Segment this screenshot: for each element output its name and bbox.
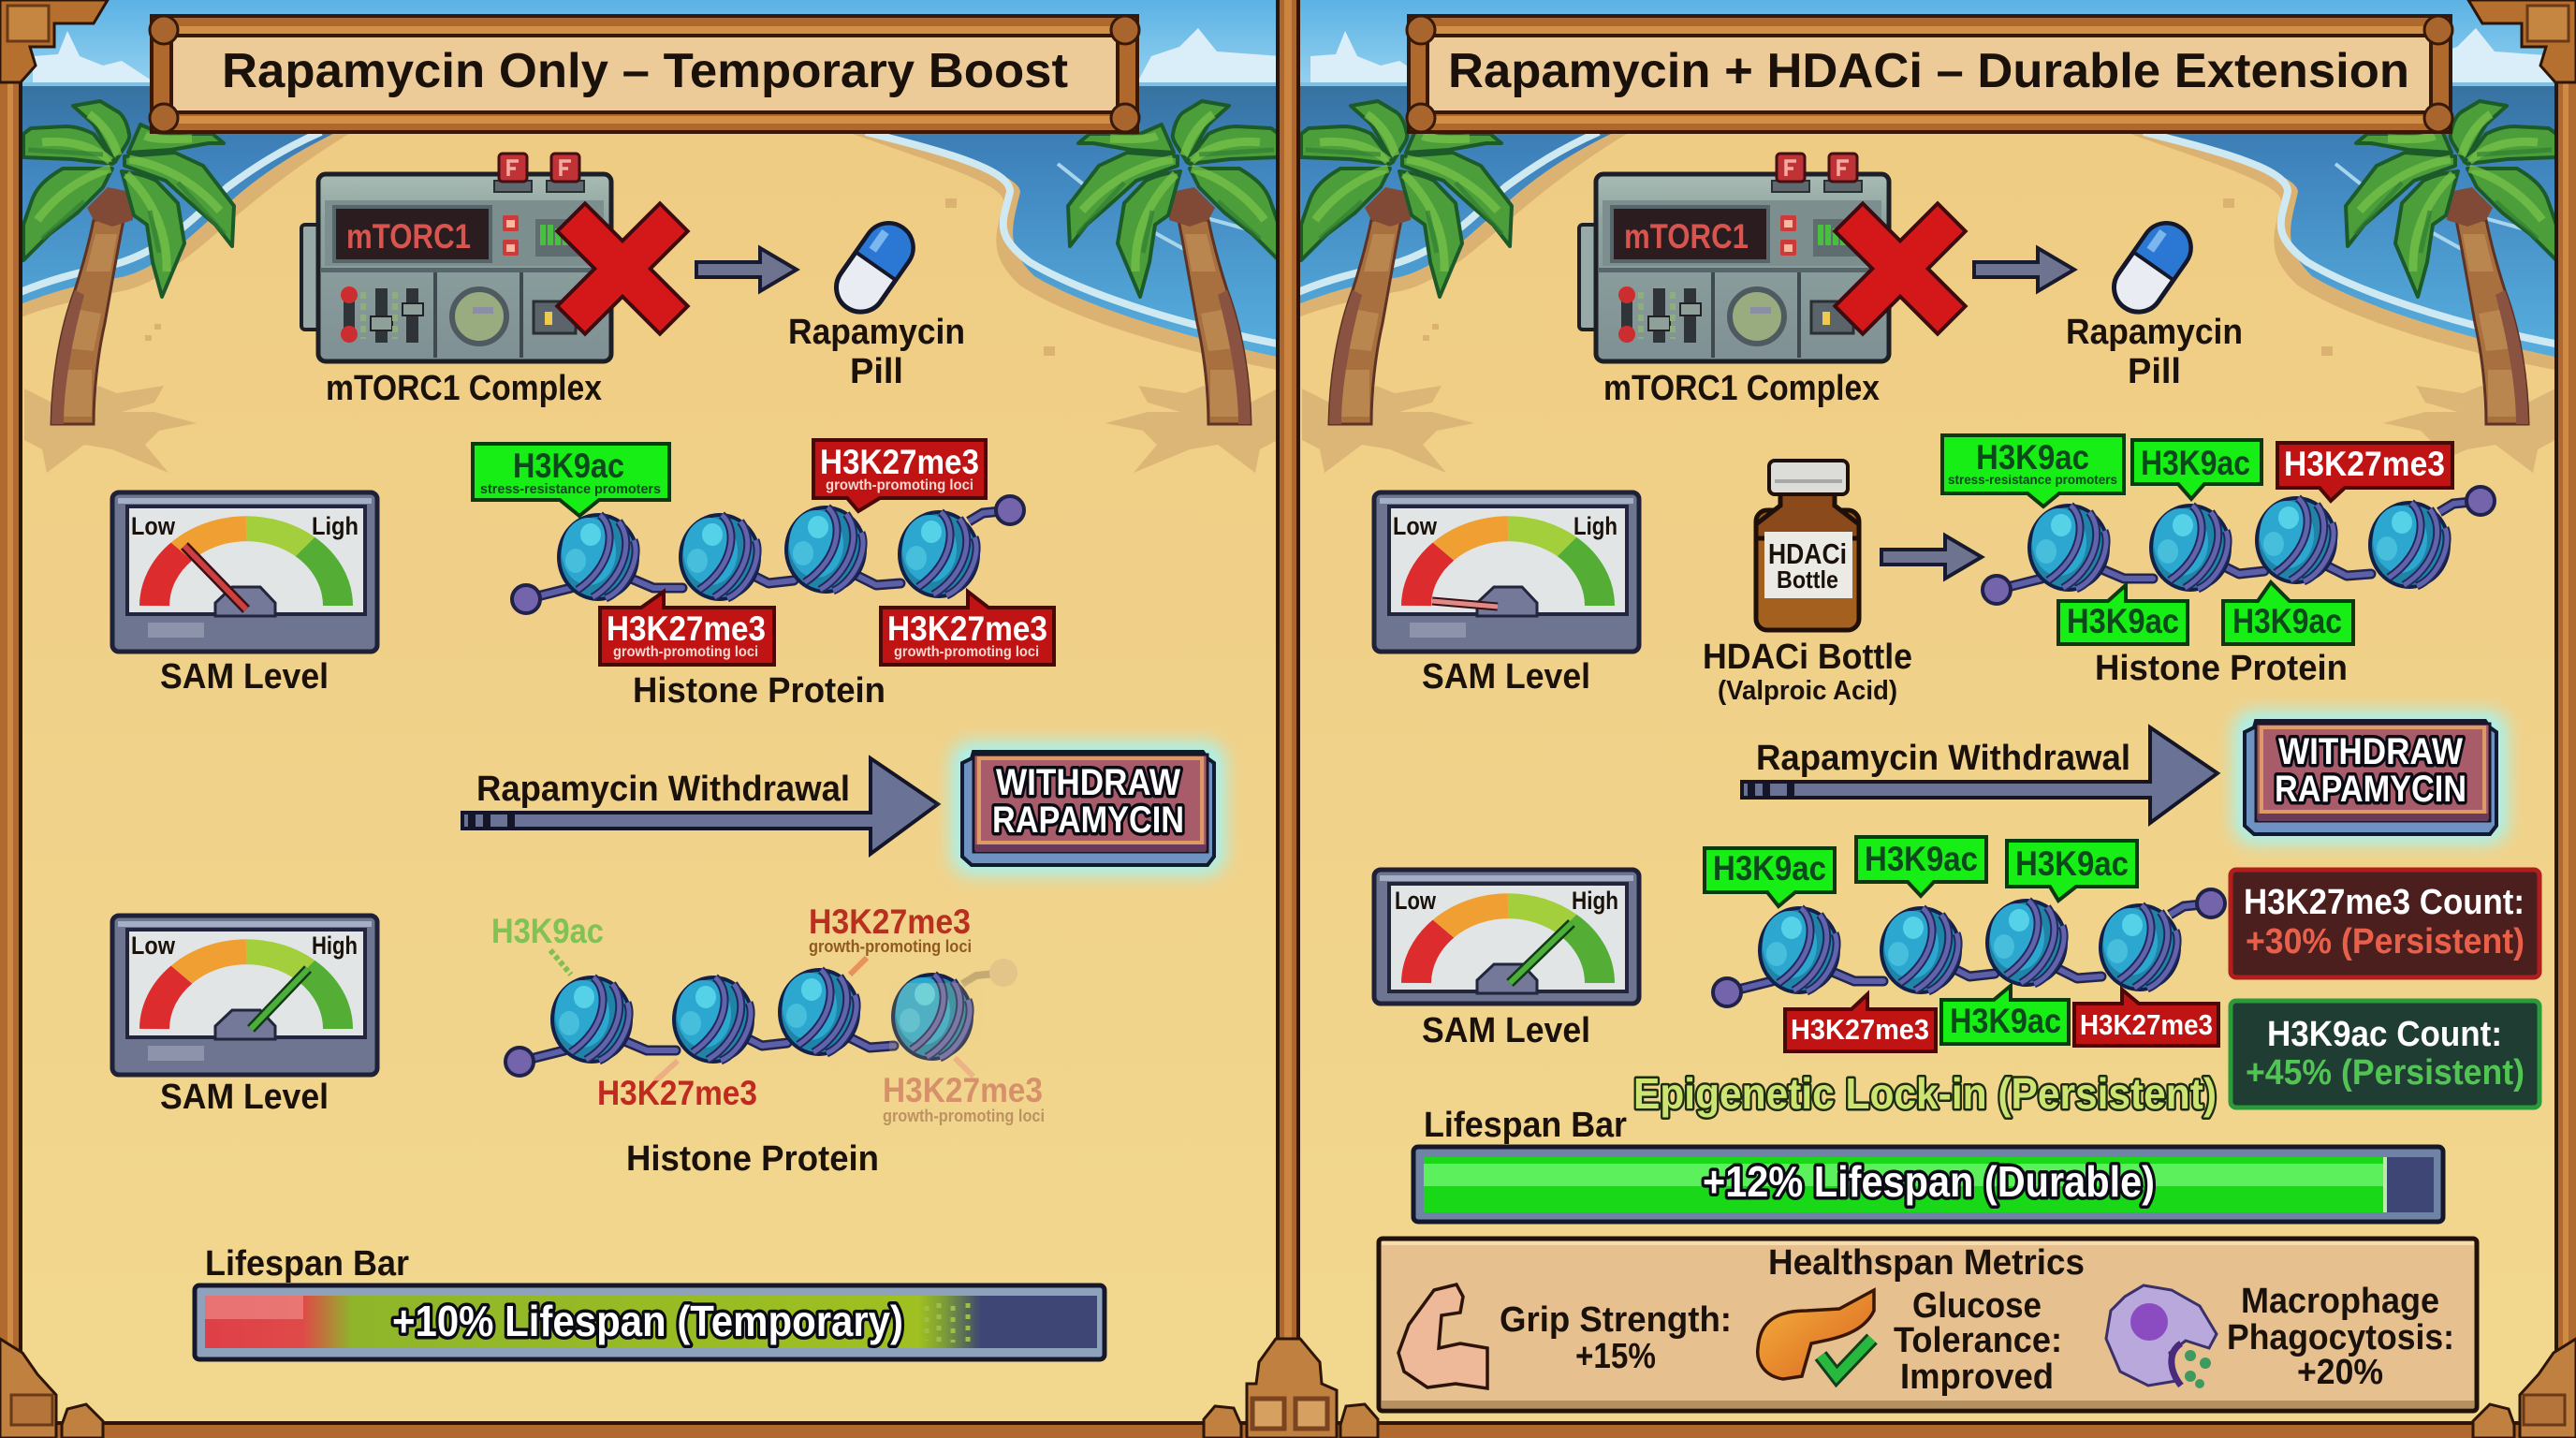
tag: H3K9ac: H3K9ac bbox=[513, 447, 624, 485]
tag: H3K27me3 bottom 1: H3K27me3 bbox=[1791, 1013, 1929, 1046]
corner: top right bbox=[2468, 0, 2576, 82]
label: lifespan bar: Lifespan Bar bbox=[1424, 1106, 1627, 1145]
corner: bottom right bbox=[2473, 1339, 2576, 1438]
tag: H3K9ac with sub: H3K9ac bbox=[1976, 438, 2089, 477]
tag: H3K27me3 lower: H3K27me3 bbox=[597, 1074, 757, 1112]
text: glucose tolerance: Tolerance: bbox=[1894, 1321, 2062, 1360]
label: rapamycin pill: Pill bbox=[850, 352, 903, 391]
corner: bottom left bbox=[0, 1339, 103, 1438]
count box: H3K9ac bbox=[2231, 1001, 2539, 1108]
post base: centre bbox=[1204, 1339, 1378, 1438]
count box: H3K9ac: H3K9ac Count: bbox=[2267, 1015, 2502, 1054]
label: rapamycin pill: Pill bbox=[2128, 352, 2181, 391]
tag: H3K27me3 bottom 2 bbox=[2074, 990, 2218, 1046]
label: mTORC1 complex: mTORC1 Complex bbox=[1603, 369, 1880, 408]
label: HDACi bottle: HDACi Bottle bbox=[1703, 638, 1912, 677]
tag: H3K9ac: stress-resistance promoters bbox=[480, 481, 661, 497]
tag: H3K9ac 2: H3K9ac bbox=[1865, 840, 1978, 878]
label: histone protein: Histone Protein bbox=[633, 671, 886, 711]
text: macrophage phagocytosis: Macrophage bbox=[2241, 1282, 2439, 1321]
heading: Healthspan Metrics bbox=[1768, 1243, 2085, 1283]
label: lifespan bar: Lifespan Bar bbox=[205, 1244, 409, 1284]
tag: H3K9ac 1 bbox=[1705, 848, 1835, 906]
tag: H3K27me3 top: H3K27me3 bbox=[820, 443, 979, 481]
button: withdraw rapamycin: RAPAMYCIN bbox=[2275, 769, 2466, 810]
text: glucose tolerance bbox=[1894, 1286, 2062, 1397]
red X bbox=[1863, 231, 1938, 306]
icon: flexed arm bbox=[1398, 1284, 1487, 1388]
title banner left: Rapamycin Only – Temporary Boost bbox=[222, 44, 1068, 98]
tag: H3K27me3 bottom 1 bbox=[1785, 994, 1936, 1051]
text: glucose tolerance: Improved bbox=[1900, 1357, 2054, 1397]
tag: H3K27me3 upper bbox=[809, 902, 972, 956]
tag: H3K27me3 bottom 2: H3K27me3 bbox=[2080, 1008, 2213, 1041]
panel: rapamycin only bbox=[21, 0, 1281, 1423]
faded tag: H3K27me3: H3K27me3 bbox=[883, 1071, 1043, 1109]
withdrawal arrow bbox=[462, 758, 938, 854]
SAM gauge high right bbox=[1374, 870, 1639, 1004]
SAM gauge low: Ligh bbox=[312, 512, 359, 540]
histone chain after withdrawal bbox=[491, 902, 1045, 1125]
text: macrophage phagocytosis bbox=[2227, 1282, 2454, 1392]
label: SAM level 2: SAM Level bbox=[160, 1078, 329, 1117]
corner: top left bbox=[0, 0, 108, 82]
tag: H3K27me3 top: growth-promoting loci bbox=[826, 477, 973, 493]
label: rapamycin pill bbox=[2066, 313, 2243, 391]
beach scene left bbox=[22, 0, 1276, 473]
faded tag: H3K9ac: H3K9ac bbox=[491, 912, 604, 950]
text: macrophage phagocytosis: +20% bbox=[2297, 1353, 2383, 1392]
withdrawal arrow bbox=[1742, 727, 2217, 823]
label: HDACi bottle bbox=[1703, 638, 1912, 706]
SAM gauge high right: High bbox=[1572, 887, 1618, 915]
SAM gauge low right: Ligh bbox=[1573, 512, 1617, 540]
faded tag: H3K27me3 bbox=[883, 1071, 1045, 1125]
tag: H3K9ac with sub bbox=[1942, 435, 2124, 506]
button: withdraw rapamycin bbox=[951, 741, 1225, 875]
label: SAM level: SAM Level bbox=[160, 657, 329, 697]
SAM gauge high right: Low bbox=[1395, 887, 1437, 915]
tag: H3K27me3 bottom 1 bbox=[600, 592, 774, 665]
label: rapamycin withdrawal: Rapamycin Withdrawal bbox=[1756, 739, 2130, 778]
mTORC1 machine left: mTORC1 bbox=[346, 217, 471, 256]
button: withdraw rapamycin: RAPAMYCIN bbox=[992, 800, 1184, 841]
panel: healthspan metrics bbox=[1379, 1239, 2477, 1411]
label: rapamycin pill bbox=[788, 313, 965, 391]
count box: H3K27me3: H3K27me3 Count: bbox=[2244, 883, 2525, 922]
text: grip strength: Grip Strength: bbox=[1500, 1300, 1732, 1340]
label: histone protein: Histone Protein bbox=[2095, 649, 2348, 688]
tag: H3K9ac 2 bbox=[1856, 837, 1986, 896]
arrow to pill bbox=[696, 248, 797, 291]
tag: H3K9ac bottom 2: H3K9ac bbox=[2232, 602, 2342, 640]
SAM gauge high bbox=[112, 916, 377, 1075]
red X bbox=[585, 231, 660, 306]
label: rapamycin pill: Rapamycin bbox=[788, 313, 965, 352]
label: rapamycin withdrawal: Rapamycin Withdrawal bbox=[476, 770, 850, 809]
panel: rapamycin + HDACi bbox=[1298, 0, 2559, 1423]
button: withdraw rapamycin: WITHDRAW bbox=[996, 762, 1180, 803]
SAM gauge low: Low bbox=[131, 512, 176, 540]
mTORC1 machine right bbox=[1579, 154, 1938, 361]
lifespan bar durable bbox=[1413, 1147, 2443, 1222]
tag: H3K27me3 bottom 2 bbox=[881, 592, 1054, 665]
histone chain before withdrawal bbox=[473, 440, 1054, 665]
tag: H3K27me3 bottom 2: growth-promoting loci bbox=[894, 644, 1039, 660]
lifespan bar temporary bbox=[195, 1285, 1105, 1359]
count box: H3K27me3: +30% (Persistent) bbox=[2246, 922, 2525, 961]
SAM gauge low right: Low bbox=[1393, 512, 1438, 540]
icon: pancreas with check bbox=[1758, 1290, 1874, 1379]
tag: H3K27me3 bottom 1: growth-promoting loci bbox=[613, 644, 758, 660]
icon: rapamycin pill bbox=[827, 213, 923, 321]
icon: HDACi bottle: Bottle bbox=[1777, 565, 1838, 594]
lifespan bar temporary: +10% Lifespan (Temporary) bbox=[392, 1297, 903, 1345]
SAM gauge high: Low bbox=[131, 932, 176, 960]
text: grip strength bbox=[1500, 1300, 1732, 1376]
tag: H3K9ac with sub: stress-resistance promoters bbox=[1948, 472, 2117, 487]
title banner right: Rapamycin + HDACi – Durable Extension bbox=[1448, 44, 2409, 98]
label: SAM level 2: SAM Level bbox=[1422, 1011, 1590, 1050]
faded tag: H3K27me3: growth-promoting loci bbox=[883, 1107, 1045, 1125]
text: glucose tolerance: Glucose bbox=[1912, 1286, 2042, 1326]
SAM gauge low right bbox=[1374, 492, 1639, 652]
tag: H3K9ac bbox=[2132, 440, 2261, 499]
tag: H3K27me3 bottom 1: H3K27me3 bbox=[607, 609, 766, 648]
arrow to histones bbox=[1881, 536, 1982, 579]
arrow to pill bbox=[1974, 248, 2074, 291]
text: grip strength: +15% bbox=[1575, 1337, 1656, 1376]
label: rapamycin pill: Rapamycin bbox=[2066, 313, 2243, 352]
count box: H3K27me3 bbox=[2231, 870, 2539, 977]
lifespan bar durable: +12% Lifespan (Durable) bbox=[1703, 1157, 2155, 1206]
tag: H3K27me3 top bbox=[813, 440, 986, 511]
button: withdraw rapamycin bbox=[2233, 711, 2508, 844]
tag: H3K27me3 upper: growth-promoting loci bbox=[809, 937, 972, 956]
tag: H3K9ac bottom: H3K9ac bbox=[1950, 1002, 2061, 1040]
icon: macrophage bbox=[2106, 1285, 2217, 1388]
tag: H3K27me3 upper: H3K27me3 bbox=[809, 902, 971, 941]
text: macrophage phagocytosis: Phagocytosis: bbox=[2227, 1318, 2454, 1357]
tag: H3K27me3 bottom 2: H3K27me3 bbox=[887, 609, 1047, 648]
beach scene right bbox=[1300, 0, 2554, 473]
tag: H3K9ac bbox=[473, 444, 669, 516]
label: mTORC1 complex: mTORC1 Complex bbox=[326, 369, 602, 408]
count box: H3K9ac: +45% (Persistent) bbox=[2246, 1053, 2525, 1093]
tag: H3K9ac 3 bbox=[2007, 841, 2137, 901]
icon: HDACi bottle: HDACi bbox=[1768, 537, 1847, 570]
label: histone protein 2: Histone Protein bbox=[626, 1139, 879, 1179]
tag: H3K9ac bottom 1 bbox=[2058, 585, 2188, 644]
tag: H3K9ac: H3K9ac bbox=[2141, 444, 2250, 482]
title banner left bbox=[150, 16, 1139, 132]
label: HDACi bottle: (Valproic Acid) bbox=[1718, 676, 1897, 706]
histone chain locked in bbox=[1705, 837, 2225, 1051]
tag: H3K27me3: H3K27me3 bbox=[2284, 445, 2445, 483]
tag: H3K9ac 3: H3K9ac bbox=[2015, 844, 2129, 883]
label: epigenetic lock-in: Epigenetic Lock-in (Persistent) bbox=[1633, 1069, 2217, 1118]
tag: H3K27me3 bbox=[2277, 443, 2452, 501]
SAM gauge high: High bbox=[312, 932, 358, 960]
title banner right bbox=[1407, 16, 2452, 132]
tag: H3K9ac bottom bbox=[1941, 986, 2069, 1044]
button: withdraw rapamycin: WITHDRAW bbox=[2278, 731, 2463, 772]
mTORC1 machine right: mTORC1 bbox=[1624, 217, 1749, 256]
histone chain with HDACi bbox=[1942, 435, 2495, 644]
icon: rapamycin pill bbox=[2104, 213, 2201, 321]
tag: H3K9ac bottom 2 bbox=[2223, 582, 2353, 644]
tag: H3K9ac bottom 1: H3K9ac bbox=[2067, 602, 2179, 640]
label: SAM level: SAM Level bbox=[1422, 657, 1590, 697]
mTORC1 machine left bbox=[301, 154, 660, 361]
tag: H3K9ac 1: H3K9ac bbox=[1713, 849, 1826, 888]
SAM gauge low bbox=[112, 492, 377, 652]
icon: HDACi bottle bbox=[1756, 461, 1859, 630]
